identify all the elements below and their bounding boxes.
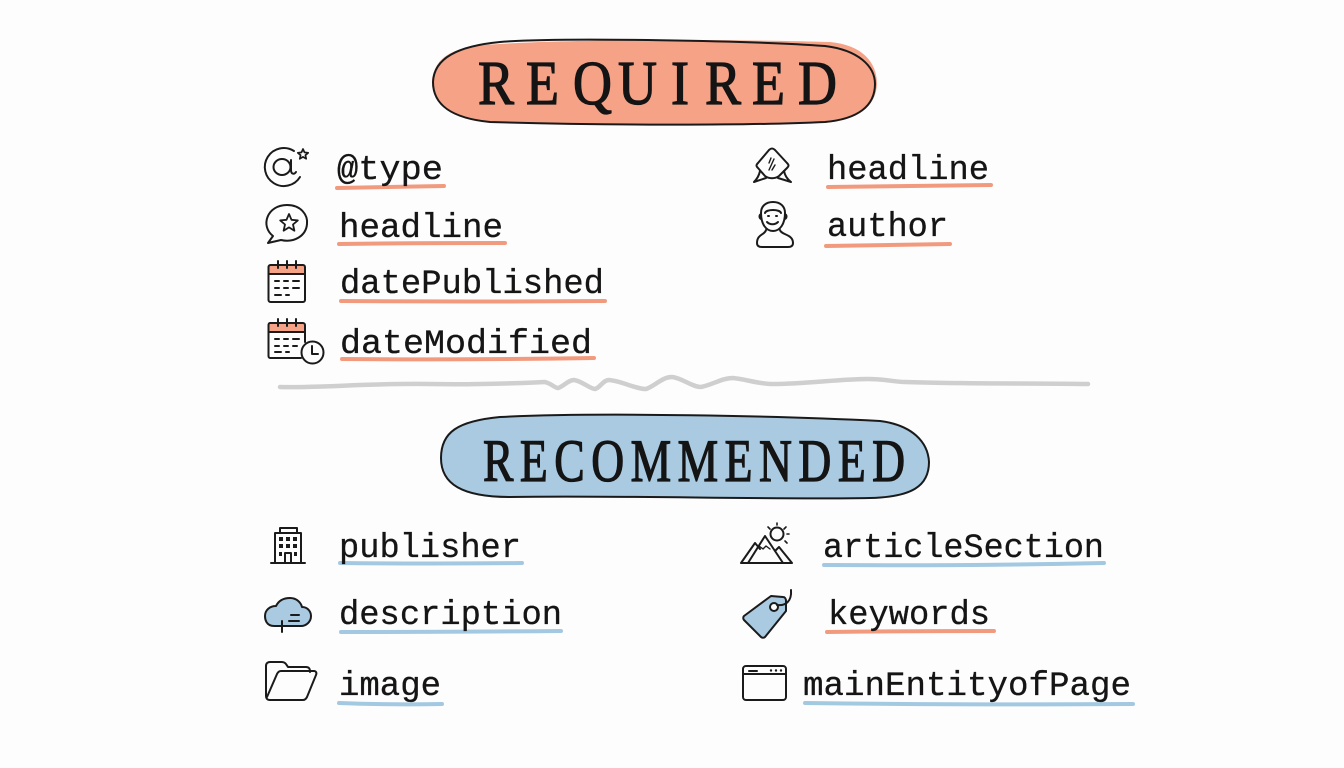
icon: cloud with plus (265, 598, 311, 632)
required list, left column (265, 148, 605, 364)
divider (280, 377, 1088, 389)
icon: calendar (268, 261, 305, 302)
heading: REQUIRED: REQUIRED (478, 49, 837, 118)
heading: RECOMMENDED: RECOMMENDED (483, 428, 905, 495)
icon: office building (271, 528, 305, 563)
label: description: description (339, 597, 562, 635)
icon: browser window (743, 666, 786, 700)
heading: REQUIRED (432, 40, 877, 125)
icon: price tag (743, 590, 791, 638)
required list, right column (754, 148, 991, 247)
icon: person (757, 202, 793, 247)
icon: at sign with star (265, 148, 308, 186)
heading: RECOMMENDED (441, 415, 929, 499)
label: articleSection: articleSection (823, 530, 1104, 568)
icon: speech bubble with star (266, 205, 307, 243)
label: image: image (339, 668, 441, 706)
label: dateModified: dateModified (340, 326, 592, 364)
label: datePublished: datePublished (340, 266, 604, 304)
label: headline: headline (339, 210, 503, 248)
label: keywords: keywords (828, 597, 990, 635)
label: @type: @type (337, 152, 443, 190)
label: headline: headline (827, 152, 989, 190)
label: mainEntityofPage: mainEntityofPage (803, 668, 1131, 706)
label: author: author (827, 209, 948, 247)
recommended list, left column (265, 528, 562, 706)
icon: calendar with clock (268, 319, 324, 364)
icon: mountains and sun (741, 523, 792, 563)
icon: diamond badge (754, 148, 791, 182)
icon: open folder (266, 662, 316, 700)
label: publisher: publisher (339, 530, 521, 568)
recommended list, right column (741, 523, 1133, 706)
